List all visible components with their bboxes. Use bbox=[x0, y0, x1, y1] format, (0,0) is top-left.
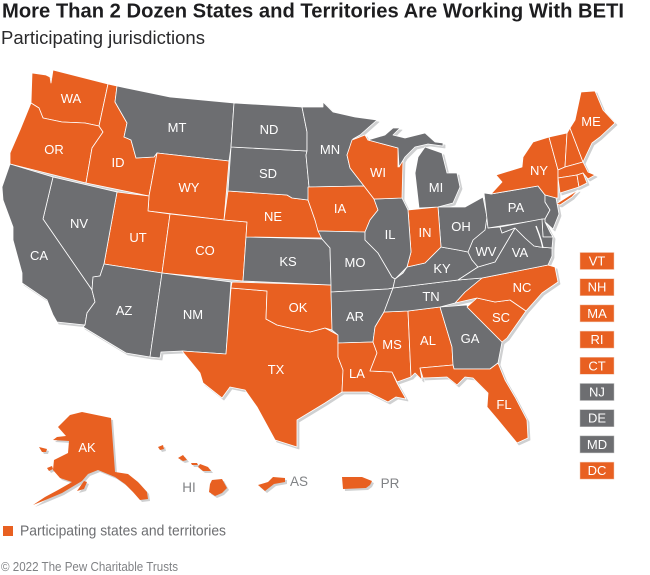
state labels: WI bbox=[370, 165, 386, 180]
state labels: TN bbox=[422, 289, 440, 304]
state: AZ bbox=[83, 264, 162, 357]
state labels: ND bbox=[260, 122, 278, 137]
state labels: NC bbox=[513, 280, 531, 295]
small state key: RI bbox=[590, 332, 604, 347]
state: OR bbox=[10, 103, 103, 183]
state: SC bbox=[467, 298, 526, 342]
state: CT bbox=[558, 175, 579, 193]
state labels: MS bbox=[382, 337, 402, 352]
territory labels bbox=[182, 474, 400, 495]
state: NJ bbox=[545, 195, 559, 229]
territory: HI bbox=[158, 445, 227, 496]
state: MO bbox=[318, 231, 395, 292]
state: MD bbox=[500, 219, 553, 248]
state labels: CA bbox=[30, 248, 48, 263]
territory: AS bbox=[258, 477, 285, 491]
small state key: NJ bbox=[589, 384, 605, 400]
state: OK bbox=[231, 282, 332, 332]
state labels: PA bbox=[508, 200, 525, 215]
state: LA bbox=[338, 342, 406, 402]
state: UT bbox=[104, 192, 170, 273]
state: VT bbox=[549, 133, 567, 170]
state labels: MN bbox=[320, 142, 340, 157]
state labels: OR bbox=[44, 142, 64, 157]
state labels: VA bbox=[512, 245, 529, 260]
state: IA bbox=[308, 186, 378, 232]
state labels: WA bbox=[61, 91, 82, 106]
state labels: SD bbox=[259, 166, 277, 181]
state labels: TX bbox=[268, 362, 285, 377]
state: MT bbox=[115, 86, 234, 161]
state labels: NM bbox=[183, 307, 203, 322]
state labels: CO bbox=[195, 243, 215, 258]
state labels: UT bbox=[129, 230, 147, 245]
state labels: AR bbox=[346, 309, 364, 324]
state: RI bbox=[577, 173, 587, 187]
state labels: AL bbox=[420, 333, 436, 348]
state: GA bbox=[440, 305, 502, 369]
state: NV bbox=[43, 177, 117, 290]
state: KY bbox=[393, 247, 478, 288]
state: NC bbox=[455, 265, 558, 311]
state: OH bbox=[438, 197, 487, 252]
state: VA bbox=[458, 228, 552, 280]
state labels: SC bbox=[492, 310, 510, 325]
state: IN bbox=[407, 207, 441, 267]
small state key: CT bbox=[588, 358, 606, 373]
state labels: LA bbox=[349, 366, 365, 381]
state: WI bbox=[347, 135, 403, 199]
subtitle: Participating jurisdictions bbox=[1, 28, 205, 48]
state: AL bbox=[408, 307, 453, 380]
state: AK bbox=[33, 412, 148, 505]
state: ID bbox=[86, 84, 157, 196]
state: PA bbox=[484, 186, 550, 228]
territory labels: AS bbox=[290, 474, 308, 489]
small state key: DC bbox=[588, 463, 606, 478]
state labels: GA bbox=[461, 331, 480, 346]
state labels: WY bbox=[179, 180, 200, 195]
state: FL bbox=[420, 363, 528, 443]
state labels: NY bbox=[530, 163, 548, 178]
small state key: DE bbox=[588, 411, 606, 426]
state labels: KY bbox=[433, 261, 451, 276]
state: NY bbox=[491, 137, 578, 205]
state: MN bbox=[302, 102, 377, 187]
state: WY bbox=[148, 153, 229, 220]
state labels: MT bbox=[168, 120, 186, 135]
state: SD bbox=[228, 147, 309, 200]
state: CO bbox=[162, 214, 247, 281]
state labels: KS bbox=[279, 254, 297, 269]
small state key: MA bbox=[587, 306, 607, 321]
state labels: NE bbox=[264, 209, 282, 224]
state labels: IN bbox=[418, 225, 432, 240]
state: AR bbox=[331, 288, 393, 343]
state: NE bbox=[224, 191, 322, 238]
Chesapeake and Delaware bays bbox=[536, 223, 553, 248]
title: More Than 2 Dozen States and Territories Are Working With BETI bbox=[2, 0, 624, 22]
legend: Participating states and territories bbox=[20, 524, 226, 540]
state: IL bbox=[365, 198, 411, 279]
state labels: OK bbox=[289, 300, 308, 315]
state: ND bbox=[231, 103, 307, 151]
state: WA bbox=[31, 70, 108, 126]
state labels: IA bbox=[334, 201, 346, 216]
state: TX bbox=[182, 288, 343, 447]
state labels: MI bbox=[429, 180, 443, 195]
state: WV bbox=[468, 217, 515, 267]
state: KS bbox=[243, 237, 331, 285]
state labels: FL bbox=[496, 397, 512, 412]
state labels: ID bbox=[112, 155, 124, 170]
small state key: NH bbox=[588, 280, 606, 295]
state: ME bbox=[570, 91, 615, 162]
map: states and territories bbox=[2, 70, 615, 505]
state: MI bbox=[368, 128, 460, 208]
state labels bbox=[30, 91, 601, 455]
state labels: WV bbox=[476, 244, 497, 259]
small state key bbox=[580, 252, 614, 479]
copyright: © 2022 The Pew Charitable Trusts bbox=[1, 560, 178, 574]
small state key: MD bbox=[587, 437, 607, 452]
state: TN bbox=[384, 278, 482, 312]
state: CA bbox=[2, 164, 95, 325]
state labels: OH bbox=[451, 219, 471, 234]
state labels: IL bbox=[385, 227, 395, 242]
state labels: NV bbox=[70, 216, 88, 231]
state: MA bbox=[558, 162, 595, 179]
state: NH bbox=[565, 128, 583, 167]
state labels: ME bbox=[581, 114, 601, 129]
small state key: VT bbox=[589, 254, 605, 268]
state: NM bbox=[150, 273, 231, 358]
state: DE bbox=[542, 219, 553, 237]
state labels: MO bbox=[345, 255, 365, 270]
territory labels: HI bbox=[182, 480, 196, 495]
territory labels: PR bbox=[381, 476, 400, 491]
state labels: AK bbox=[78, 440, 96, 455]
state labels: AZ bbox=[116, 303, 132, 318]
state: MS bbox=[370, 311, 411, 382]
territory: PR bbox=[342, 477, 372, 489]
